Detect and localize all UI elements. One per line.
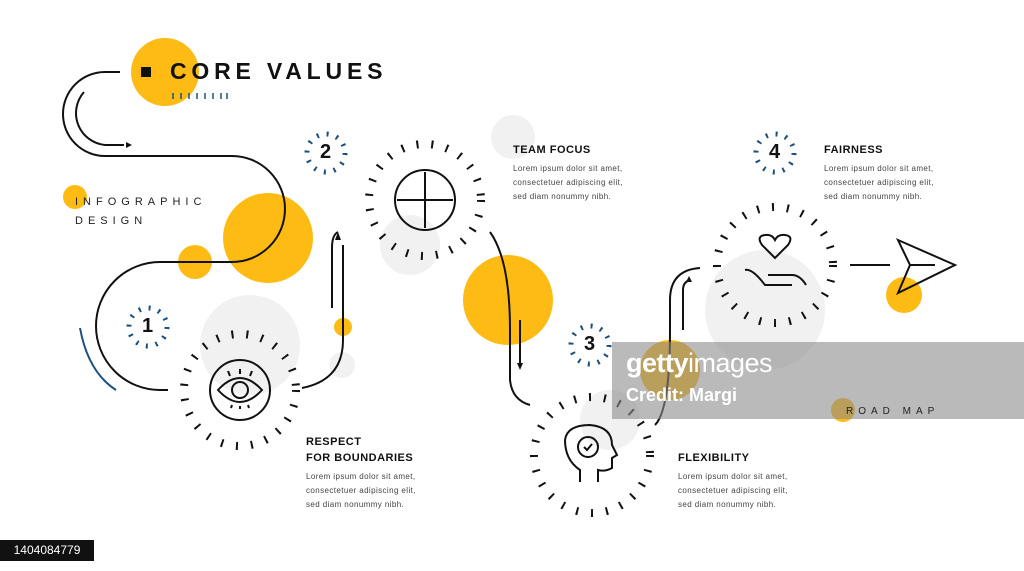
id badge: [0, 540, 94, 561]
title square: [141, 67, 151, 77]
text: Lorem ipsum dolor sit amet,: [824, 164, 934, 173]
text: respect: RESPECT: [306, 436, 361, 448]
text: Lorem ipsum dolor sit amet,: [513, 164, 623, 173]
subtitle: DESIGN: [75, 215, 147, 227]
watermark banner: ROAD MAP: [846, 406, 939, 417]
text: sed diam nonummy nibh.: [513, 192, 611, 201]
text: consectetuer adipiscing elit,: [513, 178, 623, 187]
road path: [63, 72, 955, 425]
icon: puzzle: [395, 170, 455, 230]
text: 2: [320, 141, 331, 163]
text: consectetuer adipiscing elit,: [824, 178, 934, 187]
text: 4: [769, 141, 780, 163]
number rings: [129, 134, 794, 364]
text: sed diam nonummy nibh.: [824, 192, 922, 201]
title ticks: [173, 93, 227, 99]
text: respect: [306, 436, 413, 464]
numbers: [142, 141, 780, 355]
text: consectetuer adipiscing elit,: [306, 486, 416, 495]
icon: head: [565, 425, 617, 482]
dashed rings: [184, 144, 833, 513]
text: 1: [142, 315, 153, 337]
text: sed diam nonummy nibh.: [306, 500, 404, 509]
text: consectetuer adipiscing elit,: [678, 486, 788, 495]
text: team focus: TEAM FOCUS: [513, 144, 591, 156]
text: Lorem ipsum dolor sit amet,: [306, 472, 416, 481]
text: respect: FOR BOUNDARIES: [306, 452, 413, 464]
id badge: 1404084779: [14, 543, 80, 557]
watermark banner: [612, 342, 1024, 419]
watermark banner: gettyimages: [626, 348, 772, 378]
arrow heads: [126, 142, 692, 370]
icon: heart in hand: [745, 235, 806, 285]
text: sed diam nonummy nibh.: [678, 500, 776, 509]
blue arc arrow: [80, 328, 116, 390]
text: flexibility: FLEXIBILITY: [678, 452, 750, 464]
subtitle: [75, 196, 206, 227]
icon: eye: [210, 360, 270, 420]
text: Lorem ipsum dolor sit amet,: [678, 472, 788, 481]
text: 3: [584, 333, 595, 355]
text: fairness: FAIRNESS: [824, 144, 883, 156]
subtitle: INFOGRAPHIC: [75, 196, 206, 208]
background circles: [63, 38, 922, 450]
watermark banner: Credit: Margi: [626, 385, 737, 405]
title: CORE VALUES: [170, 58, 387, 84]
